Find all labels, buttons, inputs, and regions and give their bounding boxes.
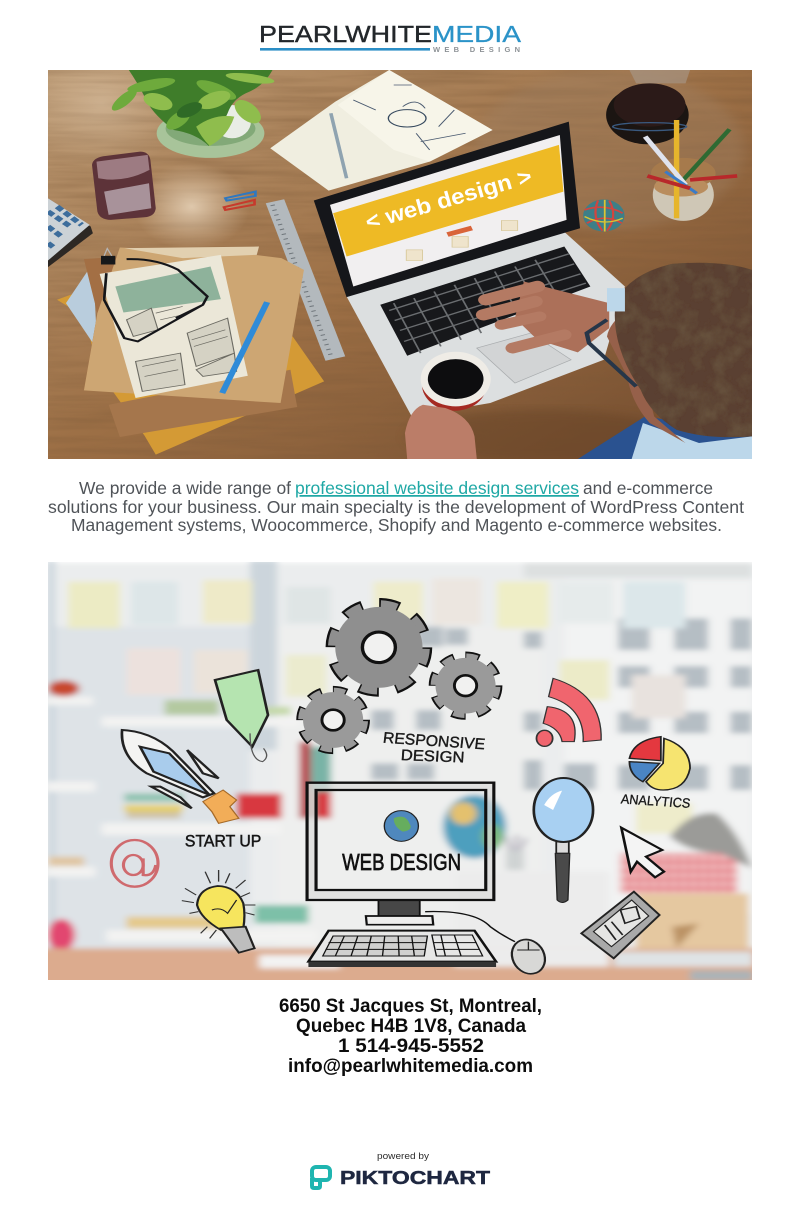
icon: left gear bbox=[302, 691, 365, 749]
start up label: START UP bbox=[185, 832, 261, 851]
hand holding cup bbox=[405, 405, 477, 459]
contact details: 1 514-945-5552 bbox=[338, 1035, 484, 1057]
paper clips bbox=[224, 192, 255, 210]
eyeglasses bbox=[104, 259, 207, 341]
photo: web design doodles over blurred office bbox=[48, 562, 752, 980]
laptop with web design page bbox=[314, 122, 625, 416]
icon: rocket bbox=[122, 730, 239, 823]
icon: right gear bbox=[434, 656, 497, 715]
plant in green pot bbox=[108, 70, 275, 158]
desk surface bbox=[12, 37, 752, 463]
powered by piktochart badge: PIKTOCHART bbox=[340, 1168, 490, 1188]
intro paragraph: We provide a wide range of bbox=[79, 478, 291, 498]
intro paragraph bbox=[48, 478, 744, 535]
icon: large gear bbox=[333, 605, 424, 690]
calculator bbox=[48, 198, 93, 267]
icon: arrow cursor bbox=[621, 828, 664, 877]
icon: computer monitor bbox=[307, 783, 494, 925]
responsive design label bbox=[382, 729, 486, 766]
responsive design label: DESIGN bbox=[400, 747, 465, 766]
icon: magnifying glass bbox=[534, 778, 593, 902]
logo: Pearl White Media: PEARLWHITE bbox=[259, 21, 432, 47]
blue pencil bbox=[222, 302, 267, 393]
icon: price tag bbox=[215, 670, 268, 762]
man seen from above bbox=[578, 263, 752, 459]
icon: light bulb bbox=[182, 870, 255, 953]
intro paragraph: Management systems, Woocommerce, Shopify and Magento e-commerce websites. bbox=[71, 515, 722, 535]
analytics label: ANALYTICS bbox=[620, 792, 691, 811]
powered by piktochart badge bbox=[310, 1151, 490, 1190]
icon: pie chart bbox=[629, 737, 690, 790]
powered by piktochart badge: powered by bbox=[377, 1151, 429, 1162]
link: professional website design services: professional website design services bbox=[295, 478, 579, 498]
binder clip bbox=[101, 249, 115, 264]
web design label: WEB DESIGN bbox=[342, 849, 461, 875]
contact details: info@pearlwhitemedia.com bbox=[288, 1055, 533, 1077]
metal ruler bbox=[266, 199, 345, 361]
open notebook with sketches bbox=[270, 70, 492, 191]
icon: piktochart mark bbox=[312, 1167, 330, 1188]
contact details: Quebec H4B 1V8, Canada bbox=[296, 1015, 526, 1037]
cup of coloured pencils bbox=[645, 120, 737, 221]
screen headline: < web design > bbox=[362, 163, 535, 235]
icon: smartphone bbox=[581, 892, 660, 958]
blurred office background bbox=[39, 560, 762, 987]
stack of folders and papers bbox=[57, 247, 324, 455]
hand on keyboard bbox=[484, 281, 609, 352]
photo: web designer at laptop on wooden desk bbox=[48, 70, 752, 459]
rubber band ball bbox=[583, 200, 624, 232]
responsive design label: RESPONSIVE bbox=[382, 729, 486, 753]
coffee cup bbox=[421, 352, 491, 411]
logo: Pearl White Media bbox=[259, 21, 522, 54]
top white strip bbox=[48, 560, 752, 562]
icon: globe bbox=[384, 811, 418, 841]
coffee carafe bbox=[606, 70, 690, 144]
intro paragraph: and e-commerce bbox=[583, 478, 713, 498]
purple leather wallet bbox=[92, 152, 156, 220]
intro paragraph: solutions for your business. Our main specialty is the development of WordPress Content bbox=[48, 497, 744, 517]
icon: wifi signal bbox=[536, 678, 601, 746]
icon: at sign bbox=[111, 840, 158, 887]
contact details bbox=[279, 995, 542, 1077]
contact details: 6650 St Jacques St, Montreal, bbox=[279, 995, 542, 1017]
icon: keyboard bbox=[308, 931, 496, 967]
icon: computer mouse with cable bbox=[425, 912, 549, 976]
logo: Pearl White Media: WEB DESIGN bbox=[433, 45, 520, 54]
logo: Pearl White Media: MEDIA bbox=[432, 21, 521, 47]
